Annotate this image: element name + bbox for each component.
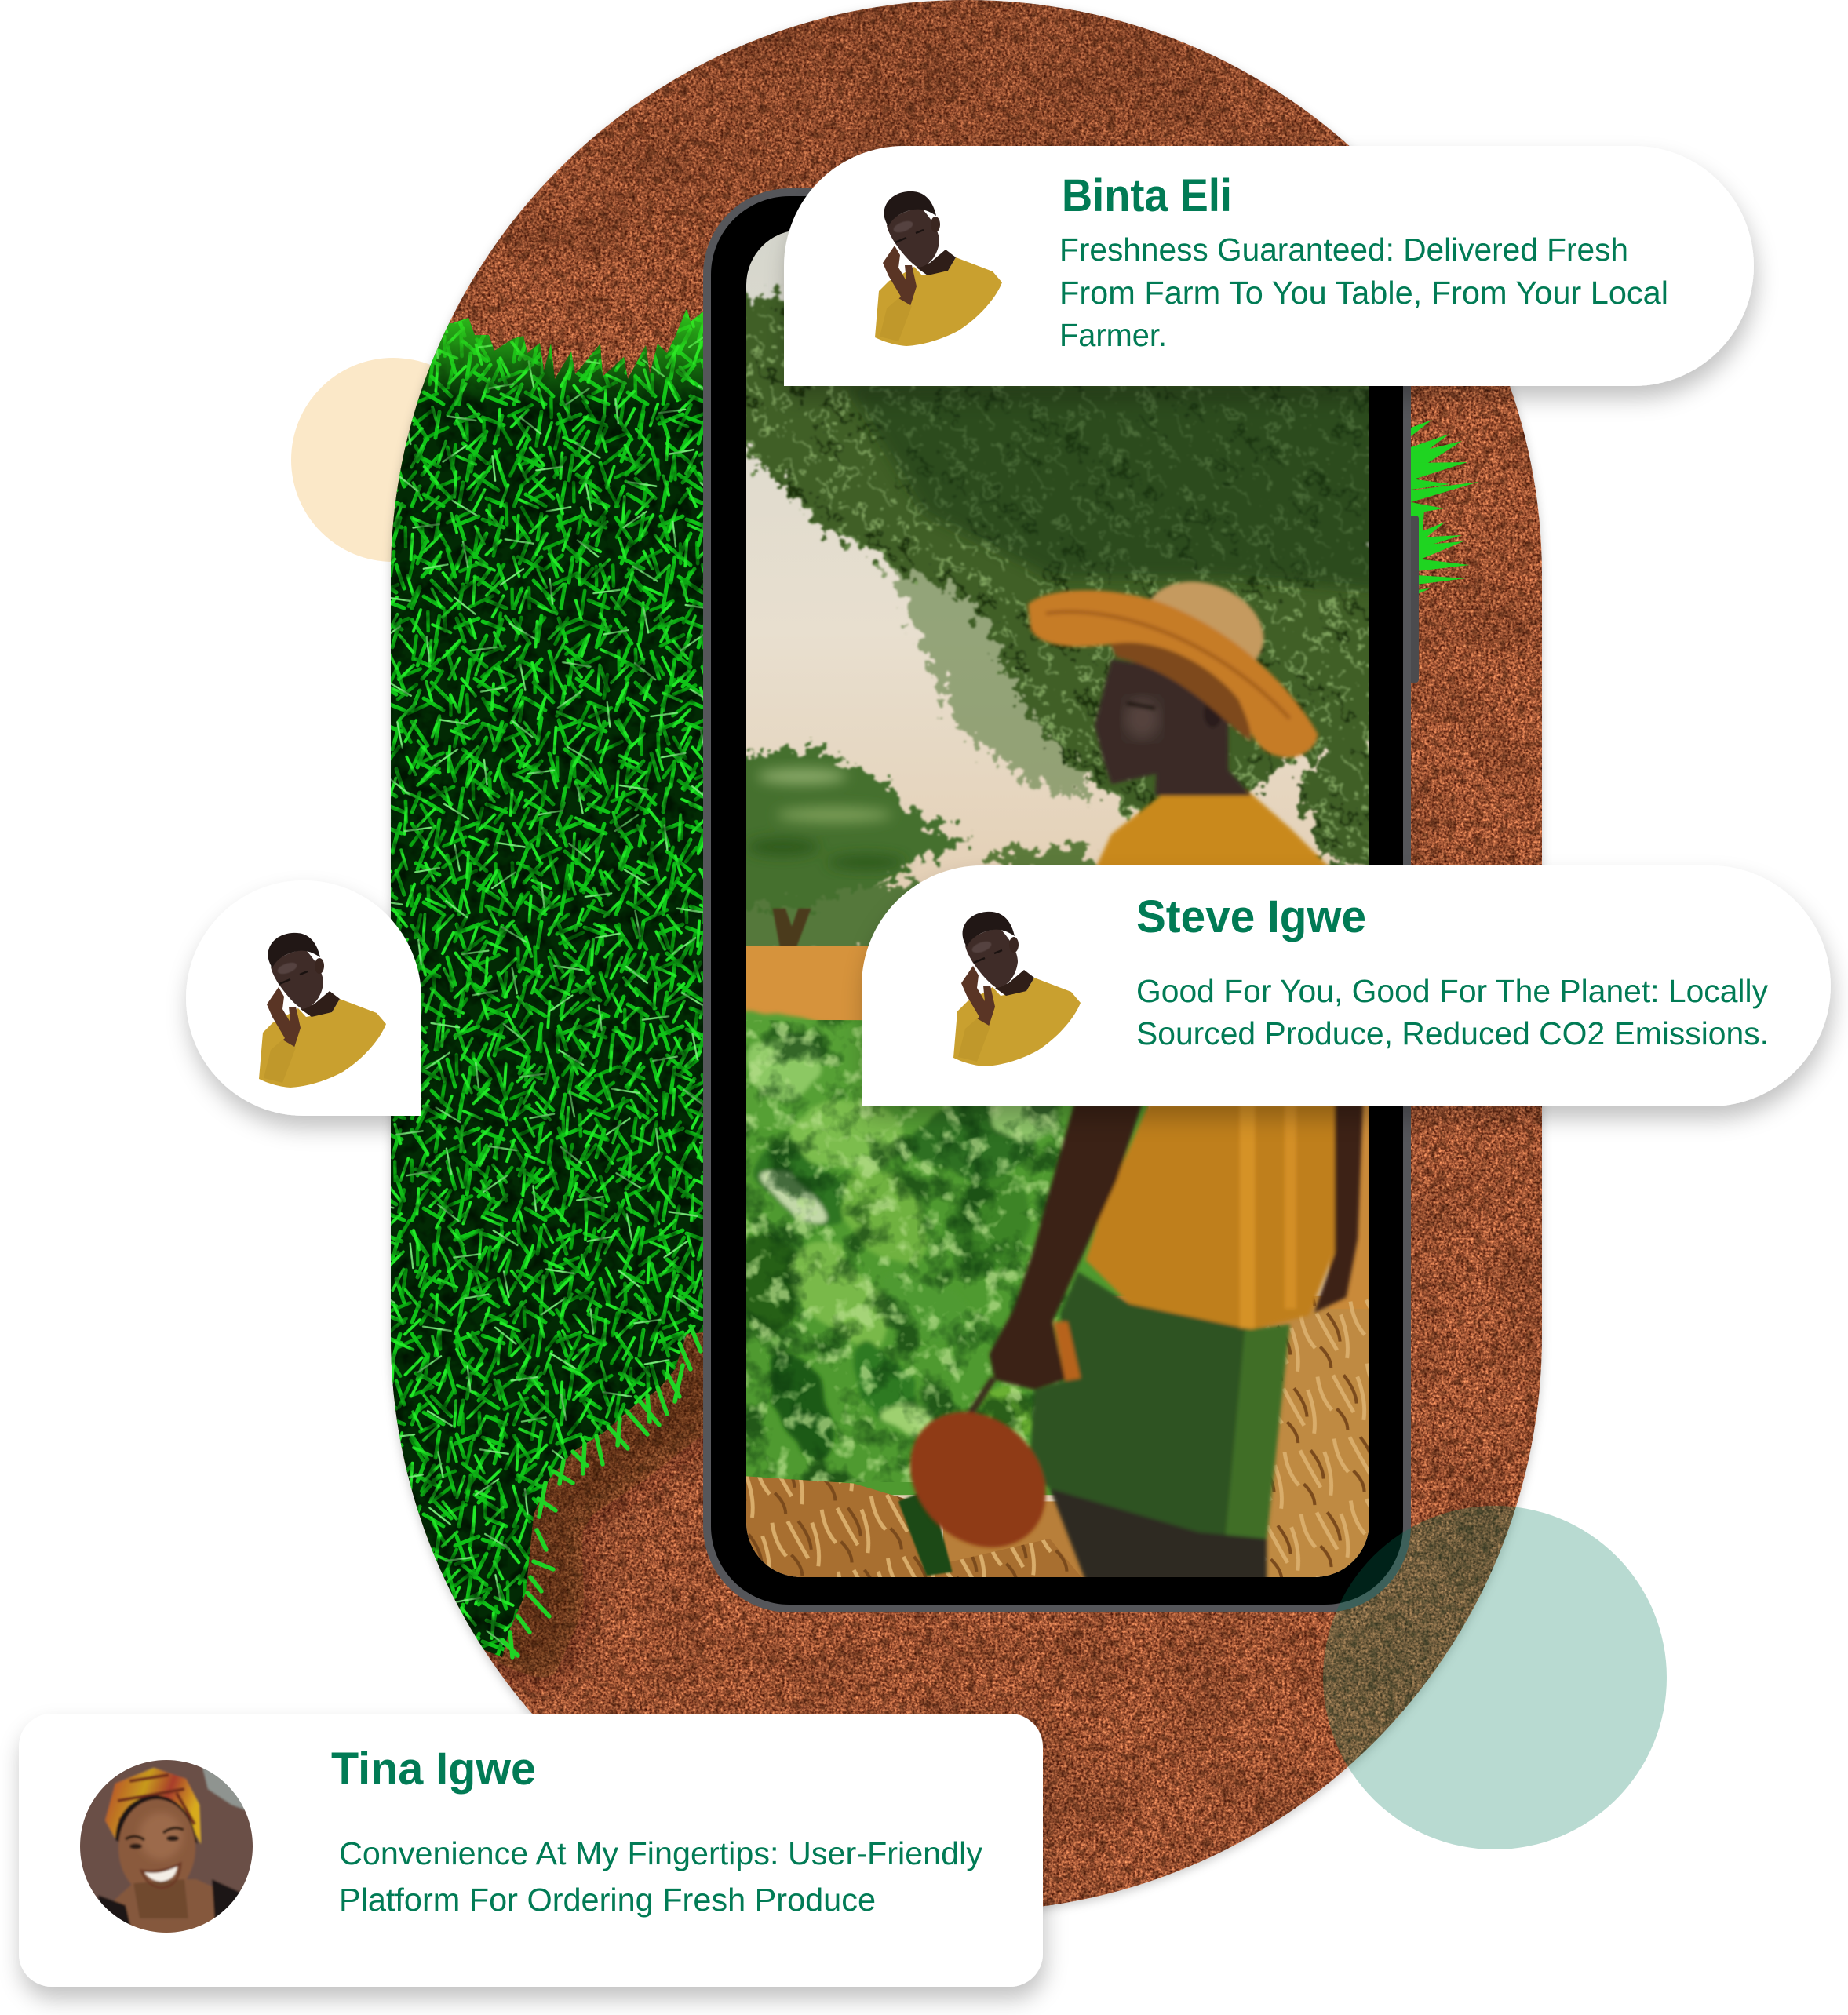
name: Binta Eli <box>1062 170 1232 221</box>
grass edge blades <box>502 1326 701 1657</box>
tree foliage <box>731 295 1380 873</box>
quote: Sourced Produce, Reduced CO2 Emissions. <box>1136 1015 1769 1051</box>
avatar: Tina <box>75 1754 259 1938</box>
card background <box>784 146 1754 386</box>
orange field <box>746 946 869 1020</box>
decorative cream circle <box>291 358 495 562</box>
far tree <box>731 747 1117 956</box>
name: Tina Igwe <box>331 1744 536 1795</box>
avatar <box>875 191 1002 346</box>
card: Binta Eli <box>784 146 1754 386</box>
wheat foreground <box>1072 1296 1380 1585</box>
quote: From Farm To You Table, From Your Local <box>1059 275 1668 311</box>
card: avatar only <box>186 880 421 1116</box>
quote: Convenience At My Fingertips: User-Friendly <box>339 1835 982 1871</box>
card background <box>19 1714 1043 1987</box>
card background <box>186 880 421 1116</box>
card: Tina Igwe <box>19 1714 1043 1987</box>
phone bezel <box>711 196 1403 1605</box>
phone body <box>703 188 1411 1612</box>
quote: Good For You, Good For The Planet: Locally <box>1136 973 1768 1009</box>
quote <box>1136 973 1769 1051</box>
farmer <box>883 566 1363 1581</box>
phone screen: farmer photo <box>731 224 1380 1585</box>
quote: Farmer. <box>1059 317 1167 353</box>
soil stadium background <box>391 0 1542 1911</box>
quote: Freshness Guaranteed: Delivered Fresh <box>1059 231 1628 268</box>
grass tuft right of phone <box>1411 420 1479 595</box>
quote: Platform For Ordering Fresh Produce <box>339 1882 876 1918</box>
avatar <box>953 912 1081 1066</box>
card: Steve Igwe <box>862 865 1831 1106</box>
phone side button <box>1409 516 1419 683</box>
grass patch <box>377 298 706 1663</box>
avatar <box>259 933 386 1088</box>
card background <box>862 865 1831 1106</box>
crop leaves <box>738 1020 1149 1495</box>
quote <box>339 1835 982 1918</box>
decorative teal circle overlay <box>1323 1506 1667 1849</box>
quote <box>1059 231 1668 353</box>
name: Steve Igwe <box>1136 891 1366 942</box>
phone <box>703 188 1419 1612</box>
